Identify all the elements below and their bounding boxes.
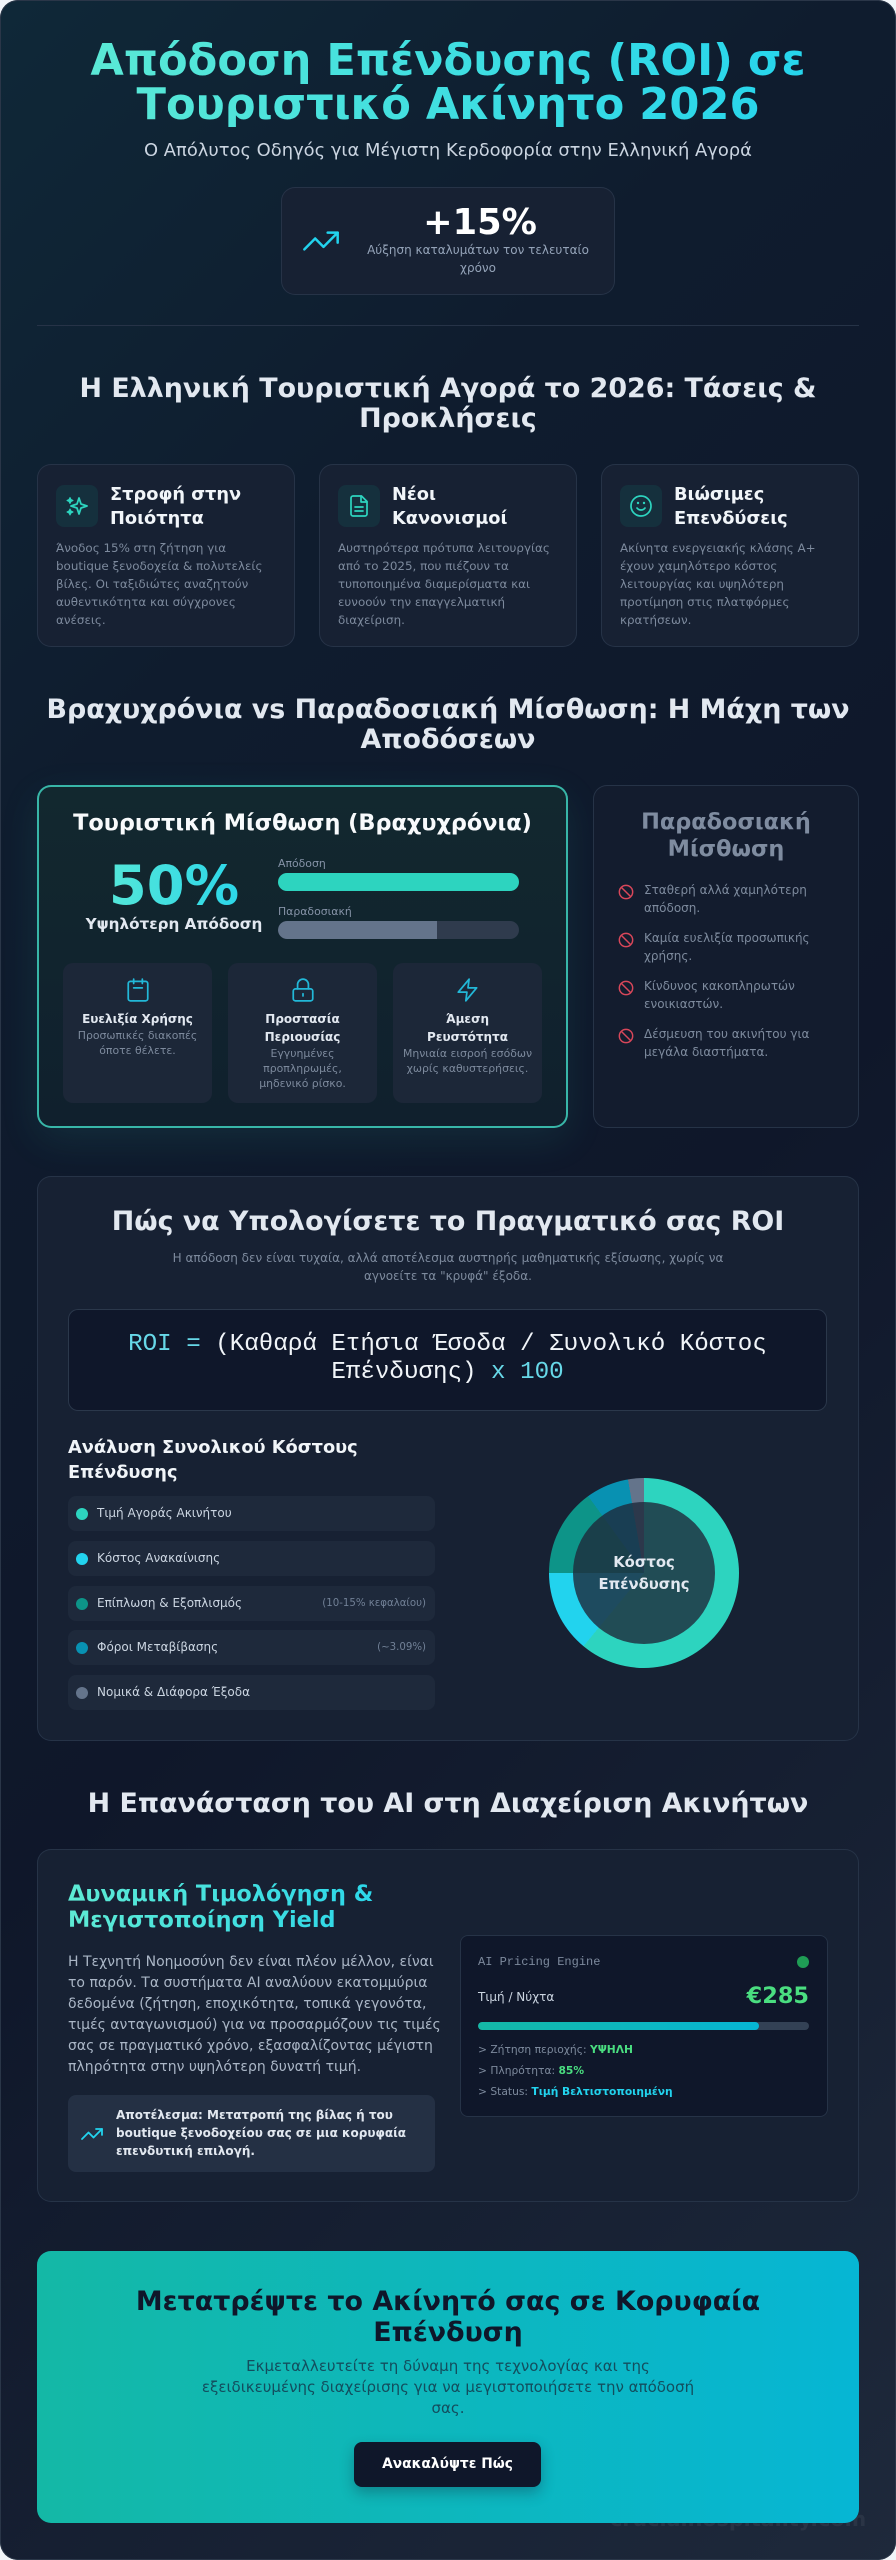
callout text (116, 2108, 406, 2158)
card text: Άνοδος 15% στη ζήτηση για (56, 541, 226, 555)
benefit cards (63, 963, 542, 1103)
card text: προτίμηση στις πλατφόρμες (620, 595, 789, 609)
callout text: boutique ξενοδοχείου σας σε μια κορυφαία (116, 2126, 406, 2140)
panel heading (68, 1881, 435, 1933)
CTA heading: Μετατρέψτε το Ακίνητό σας σε Κορυφαία (136, 2286, 760, 2317)
benefit text: χωρίς καθυστερήσεις. (407, 1062, 528, 1075)
benefit text: Μηνιαία εισροή εσόδων (403, 1047, 532, 1060)
card heading: Νέοι (392, 484, 436, 505)
card text: διαχείριση. (338, 613, 405, 627)
card text: boutique ξενοδοχεία & πολυτελείς (56, 559, 262, 573)
legend dot (76, 1552, 88, 1564)
panel heading: Δυναμική Τιμολόγηση & (68, 1881, 373, 1907)
panel text: δεδομένα (ζήτηση, εποχικότητα, τοπικά γεγονότα, (68, 1996, 426, 2012)
cost breakdown heading: Επένδυσης (68, 1462, 178, 1483)
panel: traditional rental (593, 785, 859, 1128)
benefit text: Προσωπικές διακοπές (78, 1029, 197, 1042)
panel text: το παρόν. Τα συστήματα AI αναλύουν εκατομμύρια (68, 1975, 427, 1991)
donut center (573, 1502, 715, 1644)
panel heading: Μίσθωση (668, 836, 784, 862)
formula: ROI = (Καθαρά Ετήσια Έσοδα / Συνολικό Κόστος (128, 1331, 767, 1358)
drawback text: απόδοση. (644, 901, 700, 915)
legend row: legal (68, 1675, 435, 1710)
drawback text (644, 883, 807, 915)
drawback text: μεγάλα διαστήματα. (644, 1045, 768, 1059)
drawback text: ενοικιαστών. (644, 997, 723, 1011)
bar short-term (278, 873, 519, 891)
card text: Αυστηρότερα πρότυπα λειτουργίας (338, 541, 550, 555)
intro text: Η απόδοση δεν είναι τυχαία, αλλά αποτέλεσμα αυστηρής μαθηματικής εξίσωσης, χωρίς να (173, 1251, 723, 1265)
stat value: +15% (423, 202, 537, 243)
card heading: Ποιότητα (110, 508, 204, 529)
card heading: Επενδύσεις (674, 508, 788, 529)
price value: €285 (747, 1983, 809, 2009)
legend dot (76, 1642, 88, 1654)
formula (128, 1331, 767, 1386)
heading: rental battle (46, 694, 850, 755)
card heading: Στροφή στην (110, 484, 241, 505)
icon: lock (292, 978, 314, 1002)
donut label (598, 1554, 690, 1593)
intro text (173, 1251, 723, 1283)
formula box (68, 1309, 827, 1411)
card heading: Βιώσιμες (674, 484, 764, 505)
CTA heading (136, 2286, 760, 2348)
donut chart (549, 1478, 739, 1668)
panel: AI pricing (37, 1849, 859, 2202)
icon: ban (618, 932, 634, 948)
drawback list (618, 883, 810, 1059)
heading: market section: Η Ελληνική Τουριστική Αγορά το 2026: Τάσεις & (80, 372, 816, 404)
panel: trend regulations (319, 464, 577, 647)
benefit text (78, 1029, 197, 1057)
big stat 50%: 50% (109, 854, 239, 917)
legend row: renovation (68, 1541, 435, 1576)
icon: sparkles (56, 485, 98, 527)
card text: λειτουργίας και υψηλότερη (620, 577, 784, 591)
card text: ευνοούν την επαγγελματική (338, 595, 505, 609)
status lines: > Status: Τιμή Βελτιστοποιημένη (478, 2085, 673, 2098)
legend row: furnishing (68, 1586, 435, 1621)
big stat 50% (74, 855, 274, 917)
progress bar (478, 2022, 809, 2030)
panel: short-term rental (37, 785, 568, 1128)
benefit heading: Ρευστότητα (427, 1030, 508, 1044)
panel text (68, 1954, 441, 2075)
icon: ban (618, 884, 634, 900)
panel text: σας σε πραγματικό χρόνο, εξασφαλίζοντας μέγιστη (68, 2038, 433, 2054)
icon: lightning (457, 978, 478, 1002)
card heading (674, 484, 788, 529)
benefit heading: Άμεση (446, 1012, 489, 1026)
legend note: (~3.09%) (377, 1642, 426, 1653)
legend row: property price (68, 1496, 435, 1531)
card text: τυποποιημένα διαμερίσματα και (338, 577, 530, 591)
benefit heading: Προστασία (265, 1012, 340, 1026)
benefit text: προπληρωμές, (263, 1062, 342, 1075)
legend note: (10-15% κεφαλαίου) (322, 1598, 426, 1609)
benefit: flexibility (63, 963, 212, 1103)
stat caption: Υψηλότερη Απόδοση (86, 915, 262, 933)
bar traditional (278, 921, 519, 939)
card text (620, 541, 816, 627)
status lines: > Πληρότητα: 85% (478, 2064, 584, 2077)
icon: smile (620, 485, 662, 527)
bar chart: yields (278, 857, 519, 939)
benefit heading: Περιουσίας (265, 1030, 340, 1044)
panel text: πληρότητα στην υψηλότερη δυνατή τιμή. (68, 2059, 361, 2075)
card text (338, 541, 550, 627)
intro text: αγνοείτε τα "κρυφά" έξοδα. (364, 1269, 532, 1283)
legend row: transfer taxes (68, 1630, 435, 1665)
card text: αυθεντικότητα και σύγχρονες (56, 595, 236, 609)
legend label: Επίπλωση & Εξοπλισμός (97, 1596, 242, 1610)
stat caption: χρόνο (460, 261, 496, 275)
panel text: τιμές ανταγωνισμού) για να προσαρμόζουν τις τιμές (68, 2017, 441, 2033)
drawback text (644, 979, 795, 1011)
watermark: crucialhospitality.com (610, 2507, 866, 2531)
stat caption: Αύξηση καταλυμάτων τον τελευταίο (367, 243, 589, 257)
icon: trending up (81, 2128, 103, 2140)
panel: call to action (37, 2251, 859, 2523)
heading: AI section: Η Επανάσταση του AI στη Διαχείριση Ακινήτων (88, 1788, 808, 1818)
CTA button: Ανακαλύψτε Πώς (382, 2456, 513, 2472)
legend label: Κόστος Ανακαίνισης (97, 1551, 220, 1565)
bar label short-term: Απόδοση (278, 857, 326, 870)
benefit text: όποτε θέλετε. (99, 1044, 176, 1057)
widget title: AI Pricing Engine (478, 1955, 600, 1969)
stat card: +15% (281, 187, 615, 295)
CTA text: εξειδικευμένης διαχείρισης για να μεγιστοποιήσετε την απόδοσή (202, 2378, 694, 2396)
icon: trending up (303, 231, 339, 251)
benefit text (403, 1047, 532, 1075)
callout text: επενδυτική επιλογή. (116, 2144, 255, 2158)
stat caption (367, 243, 589, 275)
CTA text: σας. (432, 2399, 464, 2417)
bar label traditional: Παραδοσιακή (278, 905, 352, 918)
card heading (392, 484, 507, 529)
legend dot (76, 1598, 88, 1610)
benefit text: Εγγυημένες (270, 1047, 335, 1060)
title (37, 38, 859, 126)
card text: έχουν χαμηλότερο κόστος (620, 559, 777, 573)
heading: market section (80, 372, 816, 434)
benefit heading (265, 1012, 340, 1044)
CTA button (354, 2442, 541, 2487)
drawback text: Καμία ευελιξία προσωπικής (644, 931, 810, 945)
drawback text (644, 931, 810, 963)
benefit text (259, 1047, 346, 1090)
legend dot (76, 1686, 88, 1698)
panel: ROI calculation (37, 1176, 859, 1741)
AI pricing engine widget (460, 1935, 828, 2117)
icon: ban (618, 980, 634, 996)
CTA text: Εκμεταλλευτείτε τη δύναμη της τεχνολογίας και της (246, 2357, 650, 2375)
CTA heading: Επένδυση (373, 2317, 523, 2348)
price label: Τιμή / Νύχτα (478, 1990, 554, 2004)
card text: κρατήσεων. (620, 613, 691, 627)
heading: rental battle: Αποδόσεων (360, 724, 536, 755)
drawback text: Κίνδυνος κακοπληρωτών (644, 979, 795, 993)
legend dot (76, 1508, 88, 1520)
panel: trend quality (37, 464, 295, 647)
callout: result (68, 2095, 435, 2172)
benefit: protection (228, 963, 377, 1103)
card text: βίλες. Οι ταξιδιώτες αναζητούν (56, 577, 248, 591)
cost breakdown heading: Ανάλυση Συνολικού Κόστους (68, 1437, 358, 1458)
panel: trend sustainable (601, 464, 859, 647)
benefit heading (427, 1012, 508, 1044)
benefit: liquidity (393, 963, 542, 1103)
heading: market section: Προκλήσεις (359, 402, 537, 434)
panel heading: Μεγιστοποίηση Yield (68, 1907, 336, 1933)
drawback text: χρήσης. (644, 949, 692, 963)
legend label: Φόροι Μεταβίβασης (97, 1640, 218, 1654)
card heading: Κανονισμοί (392, 508, 507, 529)
legend label: Νομικά & Διάφορα Έξοδα (97, 1685, 250, 1699)
icon: ban (618, 1028, 634, 1044)
card text: από το 2025, που πιέζουν τα (338, 559, 509, 573)
cost breakdown heading (68, 1437, 358, 1483)
legend label: Τιμή Αγοράς Ακινήτου (97, 1506, 232, 1520)
icon: document (338, 485, 380, 527)
drawback text: Δέσμευση του ακινήτου για (644, 1027, 809, 1041)
subtitle: Ο Απόλυτος Οδηγός για Μέγιστη Κερδοφορία στην Ελληνική Αγορά (144, 140, 752, 161)
panel heading: Τουριστική Μίσθωση (Βραχυχρόνια) (73, 810, 532, 836)
card heading (110, 484, 241, 529)
drawback text (644, 1027, 809, 1059)
status lines (478, 2043, 673, 2098)
drawback text: Σταθερή αλλά χαμηλότερη (644, 883, 807, 897)
status dot (797, 1956, 809, 1968)
card text: Ακίνητα ενεργειακής κλάσης Α+ (620, 541, 816, 555)
panel heading: Πώς να Υπολογίσετε το Πραγματικό σας ROI (112, 1206, 784, 1237)
heading: rental battle: Βραχυχρόνια vs Παραδοσιακή Μίσθωση: Η Μάχη των (46, 694, 850, 725)
card text: ανέσεις. (56, 613, 106, 627)
panel heading (641, 809, 811, 862)
card text (56, 541, 262, 627)
icon: calendar (127, 978, 149, 1002)
title: Τουριστικό Ακίνητο 2026 (136, 80, 760, 130)
formula: Επένδυσης) x 100 (331, 1359, 564, 1386)
donut label: Επένδυσης (598, 1576, 690, 1593)
callout text: Αποτέλεσμα: Μετατροπή της βίλας ή του (116, 2108, 393, 2122)
donut label: Κόστος (613, 1554, 675, 1571)
CTA text (202, 2357, 694, 2417)
benefit text: μηδενικό ρίσκο. (259, 1077, 346, 1090)
benefit heading: Ευελιξία Χρήσης (82, 1012, 193, 1026)
status lines: > Ζήτηση περιοχής: ΥΨΗΛΗ (478, 2043, 633, 2056)
panel text: Η Τεχνητή Νοημοσύνη δεν είναι πλέον μέλλον, είναι (68, 1954, 434, 1970)
panel heading: Παραδοσιακή (641, 809, 811, 835)
title: Απόδοση Επένδυσης (ROI) σε (90, 36, 806, 86)
